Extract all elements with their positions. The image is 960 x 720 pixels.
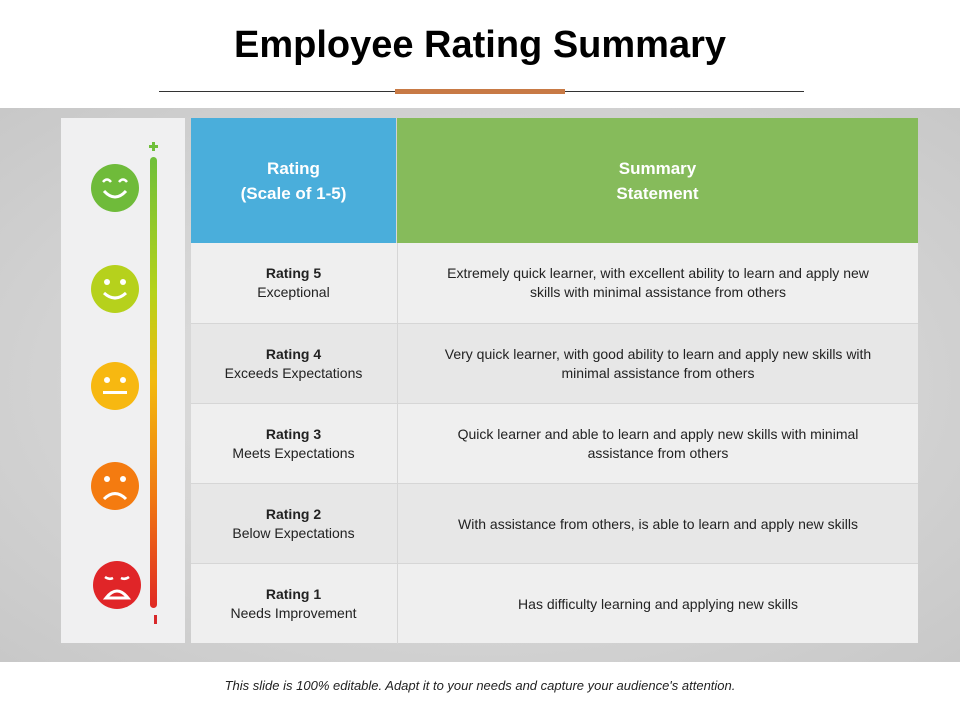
title underline [159, 91, 804, 92]
row 4: Rating 4 [266, 346, 321, 362]
row 2: Rating 2 [266, 506, 321, 522]
row 1: Rating 1 [266, 586, 321, 602]
icon: very happy [91, 164, 139, 212]
row 4: minimal assistance from others [562, 365, 754, 381]
footer note: This slide is 100% editable. Adapt it to your needs and capture your audience's attention. [225, 678, 735, 693]
row 1: Needs Improvement [230, 605, 357, 621]
panel: rating scale [61, 118, 185, 643]
header: summary [397, 118, 918, 243]
title: Employee Rating Summary [234, 24, 726, 66]
header: summary: Summary [619, 158, 696, 178]
row 3: Quick learner and able to learn and apply new skills with minimal [458, 426, 858, 442]
icon: happy [91, 265, 139, 313]
table [191, 118, 918, 643]
header: rating [191, 118, 396, 243]
header: rating: Rating [267, 158, 320, 178]
row 2 [191, 483, 918, 563]
row 1: Has difficulty learning and applying new skills [518, 596, 798, 612]
row 4 [191, 323, 918, 403]
gradient bar [150, 157, 157, 608]
minus sign [154, 615, 157, 624]
icon: neutral [91, 362, 139, 410]
row 3: Meets Expectations [232, 445, 355, 461]
row 3: assistance from others [588, 445, 728, 461]
row 4: Exceeds Expectations [225, 365, 362, 381]
row 5: Rating 5 [266, 265, 321, 281]
icon: sad [91, 462, 139, 510]
plus sign [149, 142, 158, 151]
row 3 [191, 403, 918, 483]
row 5: skills with minimal assistance from others [530, 284, 786, 300]
row 5: Exceptional [257, 284, 330, 300]
row 1 [191, 563, 918, 643]
row 5: Extremely quick learner, with excellent ability to learn and apply new [447, 265, 869, 281]
row 2: With assistance from others, is able to learn and apply new skills [458, 516, 858, 532]
header: summary: Statement [616, 184, 699, 202]
row 5 [191, 243, 918, 323]
row 4: Very quick learner, with good ability to learn and apply new skills with [445, 346, 871, 362]
icon: very sad [93, 561, 141, 609]
header: rating: (Scale of 1-5) [241, 184, 346, 202]
row 2: Below Expectations [232, 525, 355, 541]
row 3: Rating 3 [266, 426, 321, 442]
background band [0, 108, 960, 662]
